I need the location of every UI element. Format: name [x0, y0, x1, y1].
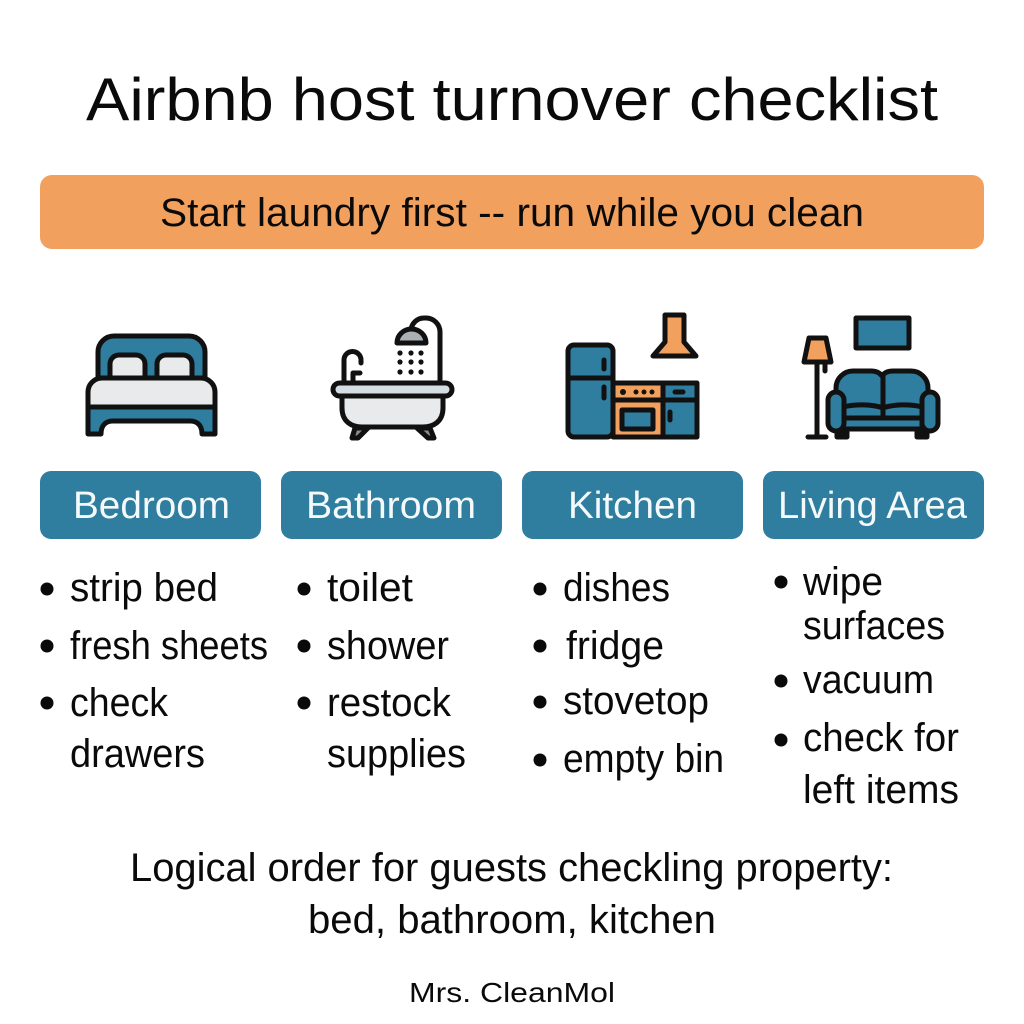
living area checklist: wipe	[802, 560, 883, 604]
panel: living area	[763, 318, 984, 812]
bathroom checklist: restock	[327, 681, 452, 725]
panel: bedroom	[40, 336, 268, 776]
bathroom checklist: supplies	[327, 732, 466, 776]
living area checklist: left items	[803, 768, 959, 812]
kitchen checklist: fridge	[566, 624, 664, 668]
heading: Bedroom	[40, 471, 261, 539]
kitchen checklist: dishes	[563, 566, 670, 610]
bedroom checklist: check	[70, 681, 169, 725]
heading: Bedroom: Bedroom	[73, 485, 230, 527]
living area checklist: surfaces	[803, 604, 945, 648]
heading: Bathroom: Bathroom	[306, 485, 476, 527]
bedroom checklist: strip bed	[70, 566, 218, 610]
bedroom checklist: fresh sheets	[70, 624, 268, 668]
bathroom checklist	[298, 566, 466, 776]
icon: bed	[88, 336, 215, 434]
icon: sofa, floor lamp and wall picture	[804, 318, 938, 437]
text block: logical order note: bed, bathroom, kitchen	[308, 898, 716, 942]
heading: Kitchen: Kitchen	[568, 485, 697, 527]
icon: oven control dots	[620, 389, 654, 395]
panel: kitchen	[522, 315, 743, 781]
heading: Living Area: Living Area	[778, 485, 968, 527]
credit: Mrs. CleanMol: Mrs. CleanMol	[409, 977, 615, 1008]
icon: kitchen with fridge, oven and hood	[568, 315, 697, 437]
icon: shower water drops	[397, 350, 424, 375]
panel: bathroom	[281, 318, 502, 776]
bathroom checklist: toilet	[327, 566, 413, 610]
callout banner: start laundry first: Start laundry first -- run while you clean	[160, 191, 864, 235]
heading: Living Area	[763, 471, 984, 539]
callout banner: start laundry first	[40, 175, 984, 249]
living area checklist: check for	[803, 716, 959, 760]
text block: logical order note	[130, 846, 893, 942]
bathroom checklist: shower	[327, 624, 449, 668]
title: Airbnb host turnover checklist	[86, 66, 938, 133]
living area checklist: vacuum	[803, 658, 934, 702]
kitchen checklist: empty bin	[563, 737, 724, 781]
heading: Kitchen	[522, 471, 743, 539]
icon: bathtub with shower	[333, 318, 452, 438]
kitchen checklist	[534, 566, 724, 781]
heading: Bathroom	[281, 471, 502, 539]
bedroom checklist: drawers	[70, 732, 205, 776]
kitchen checklist: stovetop	[563, 679, 709, 723]
living area checklist	[774, 560, 959, 812]
bedroom checklist	[40, 566, 268, 776]
text block: logical order note: Logical order for guests checkling property:	[130, 846, 893, 890]
